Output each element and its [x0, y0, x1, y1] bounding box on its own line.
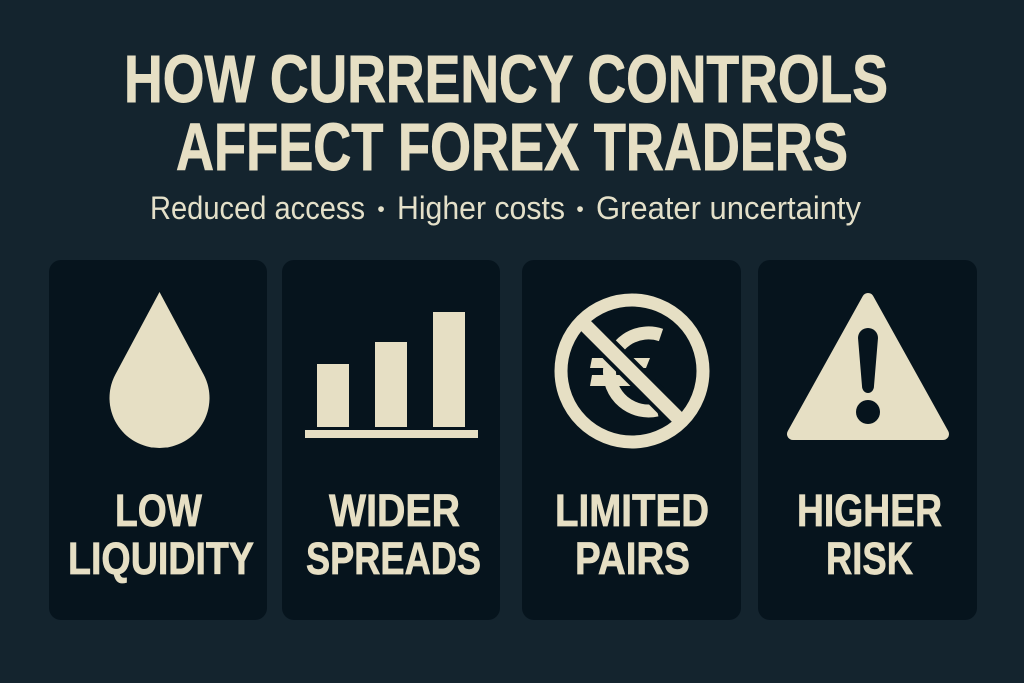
subtitle: Greater uncertainty — [596, 190, 861, 226]
label: low liquidity: LOW — [115, 485, 202, 536]
label: limited pairs: LIMITED — [555, 485, 709, 536]
label: limited pairs: PAIRS — [575, 533, 690, 584]
label: low liquidity — [68, 485, 254, 584]
label: higher risk: HIGHER — [797, 485, 942, 536]
panel: limited pairs — [522, 260, 741, 620]
label: limited pairs — [555, 485, 709, 584]
label: higher risk — [797, 485, 942, 584]
subtitle: • — [576, 198, 584, 221]
icon: bar chart — [305, 312, 478, 438]
panel: higher risk — [758, 260, 977, 620]
icon: crossed-out euro — [561, 300, 703, 442]
icon: warning triangle — [793, 299, 943, 434]
panel: low liquidity — [49, 260, 267, 620]
label: wider spreads: SPREADS — [306, 533, 481, 584]
label: higher risk: RISK — [826, 533, 913, 584]
title — [124, 42, 888, 185]
subtitle — [150, 190, 861, 226]
label: wider spreads — [306, 485, 481, 584]
subtitle: Higher costs — [397, 190, 565, 226]
label: wider spreads: WIDER — [329, 485, 460, 536]
subtitle: • — [377, 198, 385, 221]
icon: water drop — [110, 292, 209, 448]
label: low liquidity: LIQUIDITY — [68, 533, 254, 584]
panel: wider spreads — [282, 260, 500, 620]
subtitle: Reduced access — [150, 190, 365, 226]
title: AFFECT FOREX TRADERS — [176, 110, 848, 185]
